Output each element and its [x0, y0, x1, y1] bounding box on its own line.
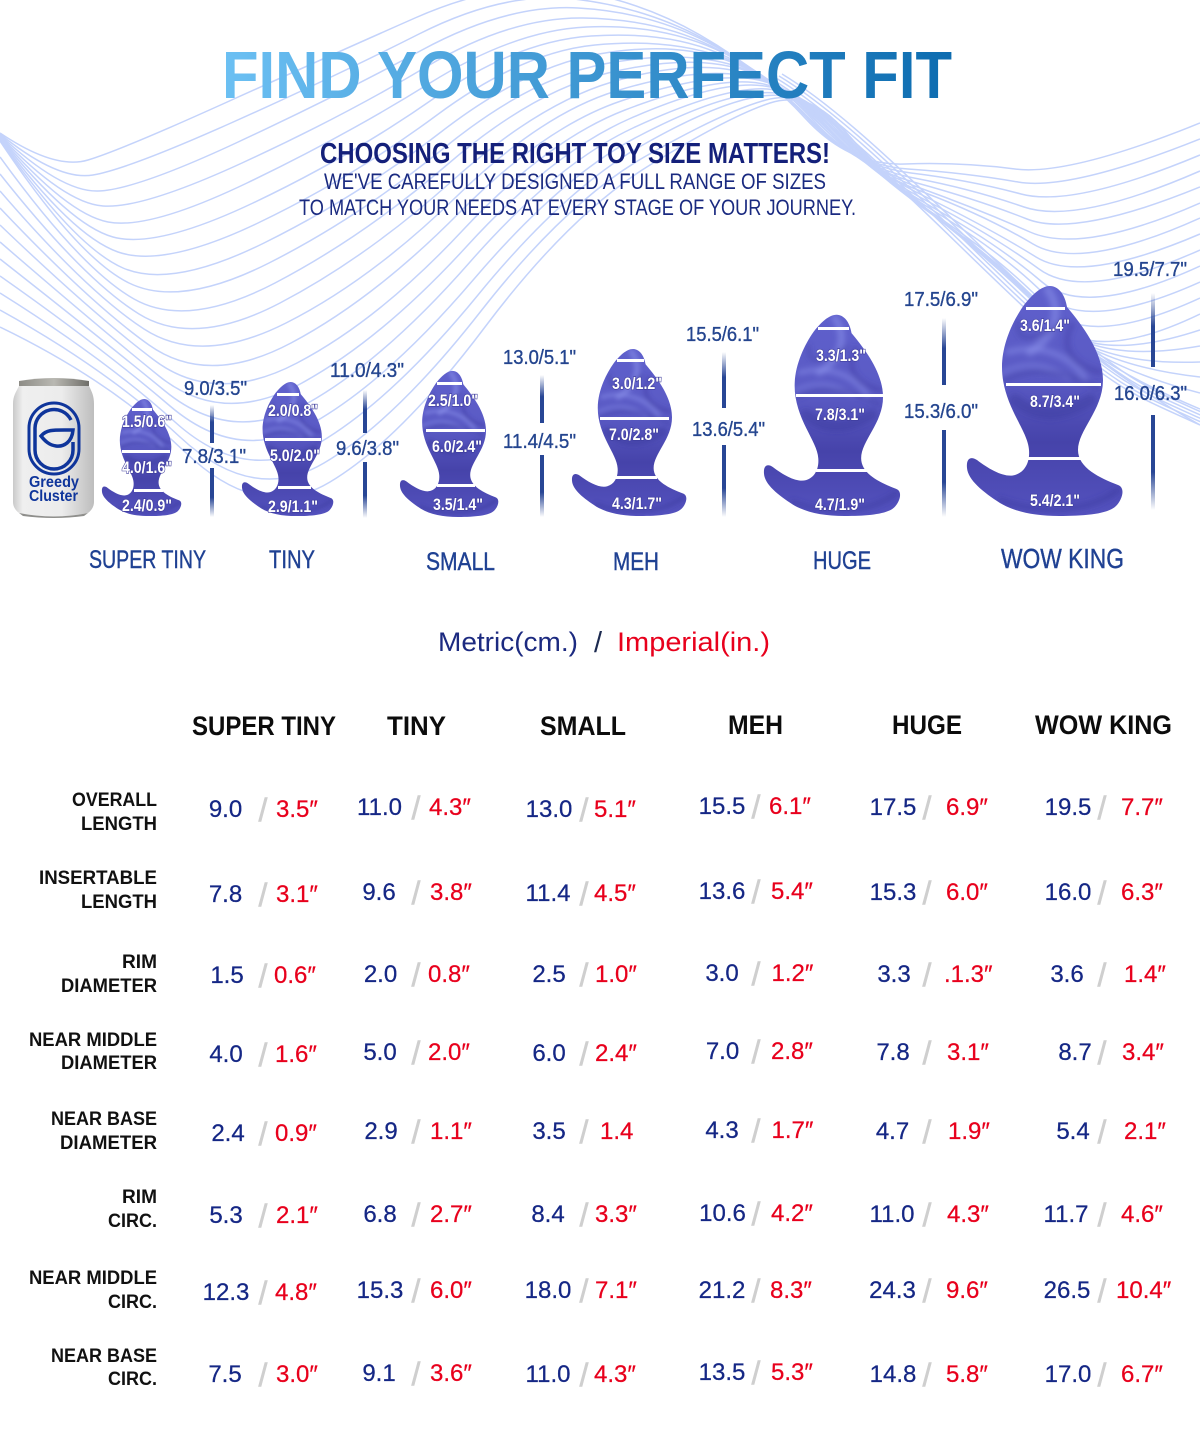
row: rim circumference: 5.3 — [209, 1202, 243, 1229]
row: near middle circumference: 7.1″ — [595, 1277, 637, 1304]
product: meh — [572, 349, 686, 516]
unit legend — [438, 627, 770, 659]
row: near middle diameter: / — [259, 1037, 268, 1073]
row: rim circumference: 8.4 — [531, 1201, 565, 1228]
row: rim circumference: 3.3″ — [595, 1201, 637, 1228]
row: near base circumference: 17.0 — [1045, 1361, 1091, 1388]
row: rim circumference: 2.7″ — [430, 1201, 472, 1228]
measure: huge lengths: 15.3/6.0" — [904, 401, 978, 423]
row: rim diameter: 0.6″ — [274, 962, 316, 989]
row: near base diameter: 3.5 — [532, 1118, 566, 1145]
size names under products: HUGE — [813, 547, 871, 575]
product: huge: 7.8/3.1" — [815, 405, 865, 424]
icon: branded drink can for scale: Cluster — [29, 488, 78, 505]
row: overall length: / — [923, 790, 932, 826]
row: insertable length: 9.6 — [362, 879, 396, 906]
row: insertable length: LENGTH — [81, 891, 157, 913]
row: overall length: 17.5 — [870, 794, 916, 821]
row: near base circumference — [51, 1345, 1163, 1393]
row: overall length: 15.5 — [699, 793, 745, 820]
table column headers: MEH — [728, 710, 783, 740]
row: near middle diameter: / — [923, 1035, 932, 1071]
row: near middle diameter: / — [1098, 1035, 1107, 1071]
measure: wow king lengths — [1113, 259, 1187, 510]
row: rim circumference: CIRC. — [108, 1210, 157, 1232]
row: near middle diameter: 3.1″ — [947, 1039, 989, 1066]
row: near base circumference: / — [259, 1357, 268, 1393]
intro line 2: TO MATCH YOUR NEEDS AT EVERY STAGE OF YOUR JOURNEY. — [299, 195, 856, 220]
row: near base circumference: 9.1 — [362, 1360, 396, 1387]
row: overall length: / — [580, 792, 589, 828]
product: huge — [764, 315, 900, 516]
row: rim circumference: 4.2″ — [771, 1200, 813, 1227]
row: near base circumference: 7.5 — [208, 1361, 242, 1388]
row: insertable length: / — [1098, 875, 1107, 911]
row: insertable length: 11.4 — [526, 880, 570, 907]
row: insertable length: INSERTABLE — [39, 867, 157, 889]
product: meh: 3.0/1.2" — [612, 374, 662, 393]
row: overall length: / — [412, 790, 421, 826]
row: near base diameter — [51, 1108, 1166, 1154]
product: super tiny: 2.4/0.9" — [122, 496, 172, 515]
row: near base diameter: DIAMETER — [60, 1132, 157, 1154]
row: rim circumference: RIM — [122, 1186, 157, 1208]
row: near middle circumference: 12.3 — [203, 1279, 249, 1306]
row: near base diameter: 2.4 — [211, 1120, 245, 1147]
row: rim diameter: 3.3 — [877, 961, 911, 988]
size names under products: TINY — [269, 546, 315, 574]
row: near middle diameter: 1.6″ — [275, 1041, 317, 1068]
row: rim circumference: 4.6″ — [1121, 1201, 1163, 1228]
row: rim circumference: / — [1098, 1197, 1107, 1233]
row: near middle circumference: / — [259, 1275, 268, 1311]
product: tiny: 5.0/2.0" — [270, 446, 320, 465]
product: small: 6.0/2.4" — [432, 437, 482, 456]
row: near base circumference: 13.5 — [699, 1359, 745, 1386]
row: near base circumference: / — [923, 1357, 932, 1393]
row: near base circumference: / — [580, 1357, 589, 1393]
row: near base circumference: 6.7″ — [1121, 1361, 1163, 1388]
measure: small lengths: 11.4/4.5" — [503, 431, 576, 453]
row: near base circumference: / — [752, 1355, 761, 1391]
measure: meh lengths — [686, 324, 765, 517]
product: super tiny: 4.0/1.6" — [122, 458, 172, 477]
row: near middle circumference — [29, 1267, 1172, 1313]
row: near base diameter: 1.9″ — [948, 1118, 990, 1145]
row: rim diameter: 3.6 — [1050, 961, 1084, 988]
row: rim diameter: 0.8″ — [428, 961, 470, 988]
row: rim circumference: / — [580, 1197, 589, 1233]
row: rim diameter: 2.0 — [364, 961, 397, 988]
row: near middle diameter: / — [412, 1035, 421, 1071]
row: near middle circumference: / — [923, 1273, 932, 1309]
row: near middle diameter: / — [752, 1034, 761, 1070]
product: huge: 4.7/1.9" — [815, 495, 865, 514]
row: rim circumference: 4.3″ — [947, 1201, 989, 1228]
intro line 1: WE'VE CAREFULLY DESIGNED A FULL RANGE OF SIZES — [324, 169, 826, 194]
row: overall length: 13.0 — [526, 796, 572, 823]
row: near middle circumference: 6.0″ — [430, 1277, 472, 1304]
subheading: CHOOSING THE RIGHT TOY SIZE MATTERS! — [320, 138, 830, 170]
row: near middle circumference: NEAR MIDDLE — [29, 1267, 157, 1289]
row: near base diameter: / — [752, 1113, 761, 1149]
row: overall length: 11.0 — [357, 794, 402, 821]
row: rim circumference — [108, 1186, 1163, 1234]
row: near middle circumference: 15.3 — [357, 1277, 403, 1304]
row: overall length: 19.5 — [1045, 794, 1091, 821]
row: near middle circumference: 24.3 — [869, 1277, 916, 1304]
product: wow king: 5.4/2.1" — [1030, 491, 1080, 510]
row: near base circumference: / — [1098, 1357, 1107, 1393]
product: huge: 3.3/1.3" — [816, 346, 866, 365]
row: near base diameter: 1.4 — [600, 1118, 633, 1145]
size names under products: SMALL — [426, 548, 495, 576]
row: near middle diameter — [29, 1029, 1164, 1074]
row: insertable length: 7.8 — [209, 881, 242, 908]
row: rim circumference: 11.0 — [870, 1201, 914, 1228]
product: meh: 4.3/1.7" — [612, 494, 662, 513]
row: insertable length: 15.3 — [870, 879, 916, 906]
row: near base circumference: / — [412, 1356, 421, 1392]
row: near middle circumference: 18.0 — [525, 1277, 571, 1304]
unit legend: Imperial(in.) — [617, 627, 770, 657]
row: near base circumference: 4.3″ — [594, 1361, 636, 1388]
icon: branded drink can for scale: Greedy — [29, 474, 79, 491]
row: rim diameter: .1.3″ — [944, 961, 993, 988]
row: overall length: 4.3″ — [429, 794, 471, 821]
row: near middle diameter: 5.0 — [363, 1039, 397, 1066]
row: overall length: 9.0 — [209, 796, 242, 823]
row: overall length: 5.1″ — [594, 796, 636, 823]
row: near middle circumference: 26.5 — [1044, 1277, 1090, 1304]
product: super tiny — [102, 399, 181, 516]
row: rim diameter: / — [923, 957, 932, 993]
product: small — [400, 371, 498, 517]
row: near middle circumference: / — [580, 1273, 589, 1309]
table column headers: SUPER TINY — [192, 711, 336, 741]
table column headers: SMALL — [540, 711, 626, 741]
measure: wow king lengths: 16.0/6.3" — [1114, 383, 1187, 405]
row: near base diameter: 2.9 — [364, 1118, 398, 1145]
row: overall length: 6.1″ — [769, 793, 811, 820]
row: insertable length: / — [752, 874, 761, 910]
table column headers: WOW KING — [1035, 710, 1172, 740]
row: near middle diameter: 2.4″ — [595, 1040, 637, 1067]
row: insertable length: 4.5″ — [594, 880, 636, 907]
row: near base diameter: / — [923, 1114, 932, 1150]
row: near base circumference: 14.8 — [870, 1361, 916, 1388]
intro text block — [299, 138, 856, 220]
icon: branded drink can for scale — [13, 378, 94, 518]
row: near base circumference: CIRC. — [108, 1368, 157, 1390]
product: tiny — [242, 382, 333, 516]
row: insertable length: / — [923, 875, 932, 911]
row: rim circumference: 11.7 — [1044, 1201, 1088, 1228]
size names under products — [89, 543, 1124, 576]
measure: tiny lengths — [330, 360, 404, 518]
row: overall length: / — [1098, 790, 1107, 826]
row: overall length: OVERALL — [72, 789, 157, 811]
measure: small lengths — [503, 347, 576, 517]
row: near base circumference: NEAR BASE — [51, 1345, 157, 1367]
product: wow king: 8.7/3.4" — [1030, 392, 1080, 411]
table column headers — [192, 710, 1172, 741]
row: overall length: 7.7″ — [1121, 794, 1163, 821]
row: overall length: / — [259, 792, 268, 828]
row: near base diameter: 4.7 — [876, 1118, 909, 1145]
row: near middle circumference: 9.6″ — [946, 1277, 988, 1304]
row: near middle circumference: CIRC. — [108, 1291, 157, 1313]
row: near base diameter: / — [412, 1114, 421, 1150]
row: rim circumference: 2.1″ — [276, 1202, 318, 1229]
row: near middle circumference: 21.2 — [699, 1277, 745, 1304]
row: insertable length: / — [259, 877, 268, 913]
row: near middle circumference: / — [412, 1273, 421, 1309]
row: rim diameter: 1.5 — [210, 962, 244, 989]
row: near middle circumference: 8.3″ — [770, 1277, 812, 1304]
table column headers: HUGE — [892, 710, 962, 740]
measure: small lengths: 13.0/5.1" — [503, 347, 576, 369]
product: small: 2.5/1.0" — [428, 391, 478, 410]
row: rim diameter: / — [259, 958, 268, 994]
row: near base diameter: 4.3 — [705, 1117, 739, 1144]
product: tiny: 2.9/1.1" — [268, 497, 318, 516]
product: wow king — [967, 286, 1122, 516]
row: rim diameter: / — [752, 956, 761, 992]
product: wow king: 3.6/1.4" — [1020, 316, 1070, 335]
measure: tiny lengths: 9.6/3.8" — [336, 438, 399, 460]
measure: huge lengths: 17.5/6.9" — [904, 289, 978, 311]
row: near middle diameter: 3.4″ — [1122, 1039, 1164, 1066]
row: overall length: LENGTH — [81, 813, 157, 835]
row: rim diameter: 3.0 — [705, 960, 739, 987]
unit legend: Metric(cm.) — [438, 627, 578, 657]
measure: wow king lengths: 19.5/7.7" — [1113, 259, 1187, 281]
row: near middle diameter: NEAR MIDDLE — [29, 1029, 157, 1051]
row: rim diameter: 1.4″ — [1124, 961, 1166, 988]
row: near base circumference: 5.8″ — [946, 1361, 988, 1388]
measure: super tiny lengths: 7.8/3.1" — [182, 446, 246, 468]
row: rim diameter: 1.2″ — [772, 960, 814, 987]
row: near base circumference: 11.0 — [526, 1361, 570, 1388]
row: near middle diameter: 7.8 — [876, 1039, 910, 1066]
row: rim diameter: / — [412, 957, 421, 993]
row: near base diameter: / — [1098, 1114, 1107, 1150]
size names under products: SUPER TINY — [89, 546, 206, 574]
row: rim circumference: / — [259, 1198, 268, 1234]
product: tiny: 2.0/0.8" — [268, 401, 318, 420]
row: rim diameter: 2.5 — [532, 961, 566, 988]
row: near middle diameter: 2.0″ — [428, 1039, 470, 1066]
row: rim circumference: 6.8 — [363, 1201, 397, 1228]
row: insertable length: 6.3″ — [1121, 879, 1163, 906]
unit legend: / — [594, 627, 603, 659]
row: near middle diameter: / — [580, 1036, 589, 1072]
measure: huge lengths — [904, 289, 978, 517]
row: near middle diameter: 2.8″ — [771, 1038, 813, 1065]
row: rim diameter: RIM — [122, 951, 157, 973]
row: near base diameter: NEAR BASE — [51, 1108, 157, 1130]
row: overall length: / — [752, 789, 761, 825]
row: insertable length: 3.1″ — [276, 881, 318, 908]
row: rim circumference: / — [752, 1196, 761, 1232]
row: insertable length: 6.0″ — [946, 879, 988, 906]
product: small: 3.5/1.4" — [433, 495, 483, 514]
size names under products: MEH — [613, 548, 659, 576]
row: near base circumference: 5.3″ — [771, 1359, 813, 1386]
product: meh: 7.0/2.8" — [609, 425, 659, 444]
title: FIND YOUR PERFECT FIT — [222, 38, 952, 113]
size names under products: WOW KING — [1001, 543, 1124, 574]
measure: meh lengths: 15.5/6.1" — [686, 324, 759, 346]
row: near middle diameter: 7.0 — [706, 1038, 739, 1065]
row: near middle circumference: 4.8″ — [275, 1279, 317, 1306]
measure: super tiny lengths — [182, 378, 247, 517]
row: near base diameter: / — [259, 1116, 268, 1152]
row: near middle circumference: / — [1098, 1273, 1107, 1309]
row: insertable length: 16.0 — [1045, 879, 1091, 906]
row: overall length: 3.5″ — [276, 796, 318, 823]
row: near middle diameter: 4.0 — [209, 1041, 243, 1068]
row: rim diameter — [61, 951, 1166, 997]
row: rim diameter: 1.0″ — [595, 961, 637, 988]
measure: super tiny lengths: 9.0/3.5" — [184, 378, 247, 400]
row: near base circumference: 3.0″ — [276, 1361, 318, 1388]
row: insertable length: 3.8″ — [430, 879, 472, 906]
row: rim circumference: / — [923, 1197, 932, 1233]
row: near base circumference: 3.6″ — [430, 1360, 472, 1387]
row: near middle diameter: 6.0 — [532, 1040, 566, 1067]
row: near base diameter: 1.7″ — [772, 1117, 814, 1144]
row: rim circumference: / — [412, 1197, 421, 1233]
row: near middle diameter: DIAMETER — [61, 1052, 157, 1074]
background wave lines — [0, 0, 1200, 497]
row: near middle circumference: 10.4″ — [1116, 1277, 1172, 1304]
row: insertable length: 5.4″ — [771, 878, 813, 905]
measure: meh lengths: 13.6/5.4" — [692, 419, 765, 441]
row: rim diameter: DIAMETER — [61, 975, 157, 997]
row: near base diameter: 2.1″ — [1124, 1118, 1166, 1145]
row: insertable length: 13.6 — [699, 878, 745, 905]
row: rim diameter: / — [1098, 957, 1107, 993]
row: near base diameter: / — [580, 1114, 589, 1150]
row: near middle circumference: / — [752, 1273, 761, 1309]
row: near base diameter: 1.1″ — [430, 1118, 472, 1145]
row: rim circumference: 10.6 — [699, 1200, 746, 1227]
row: near middle diameter: 8.7 — [1058, 1039, 1092, 1066]
row: insertable length: / — [580, 876, 589, 912]
row: insertable length — [39, 867, 1163, 913]
row: overall length: 6.9″ — [946, 794, 988, 821]
row: overall length — [72, 789, 1163, 835]
row: insertable length: / — [412, 875, 421, 911]
row: near base diameter: 0.9″ — [275, 1120, 317, 1147]
row: near base diameter: 5.4 — [1056, 1118, 1090, 1145]
measure: tiny lengths: 11.0/4.3" — [330, 360, 404, 382]
table column headers: TINY — [387, 711, 446, 741]
product: super tiny: 1.5/0.6" — [122, 412, 172, 431]
row: rim diameter: / — [580, 957, 589, 993]
